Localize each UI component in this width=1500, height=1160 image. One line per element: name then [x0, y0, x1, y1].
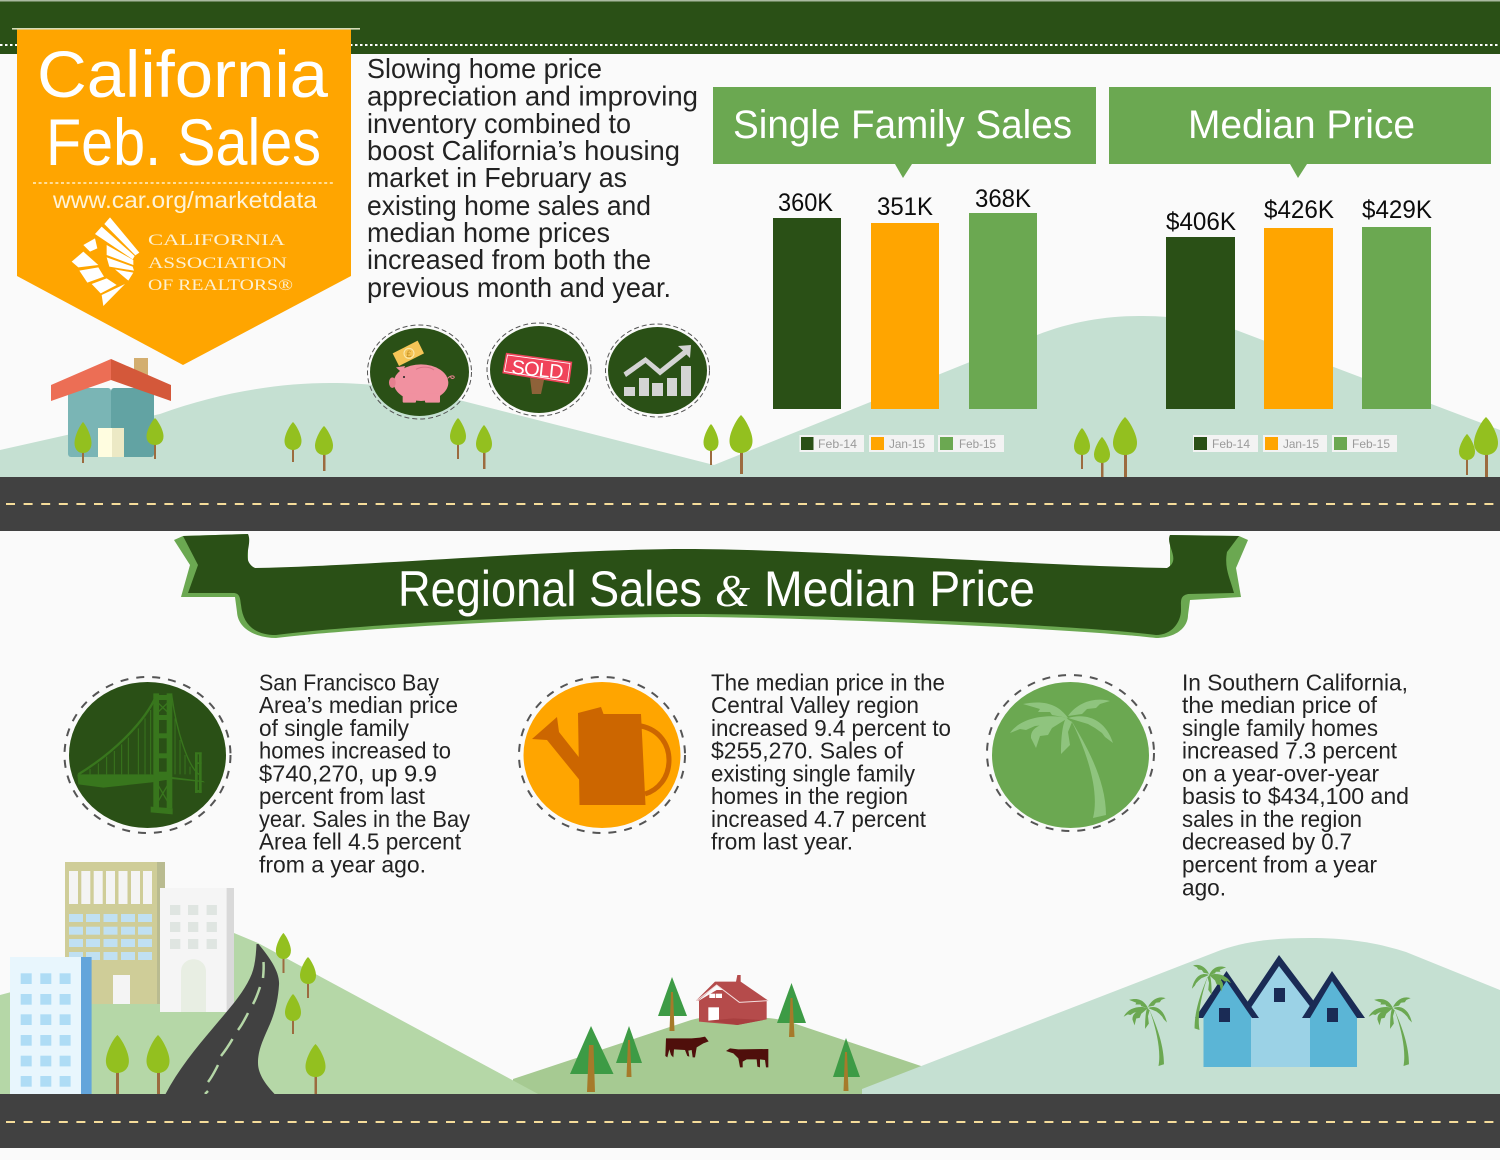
bar chart: single family sales: 360K — [778, 189, 833, 217]
text: Central Valley: increased 9.4 percent to — [711, 715, 951, 741]
header: Single Family Sales: Single Family Sales — [733, 103, 1072, 147]
intro text: boost California’s housing — [367, 135, 680, 166]
text: Southern California: on a year-over-year — [1182, 760, 1379, 786]
pine trees — [570, 977, 860, 1092]
text: San Francisco Bay: year. Sales in the Bay — [259, 806, 470, 832]
road: bottom — [0, 1094, 1500, 1148]
legend: price chart: Jan-15 — [1283, 437, 1319, 451]
trees: city — [106, 933, 326, 1094]
ribbon: Regional Sales & Median Price: & — [715, 565, 750, 616]
text: Southern California — [1182, 670, 1409, 900]
bar chart: single family sales: 351K — [877, 193, 933, 221]
bar chart: median price: $426K — [1264, 196, 1334, 224]
text: Southern California: increased 7.3 percent — [1182, 738, 1397, 764]
text: San Francisco Bay: of single family — [259, 715, 409, 741]
bar chart: median price — [1166, 196, 1432, 409]
intro text: median home prices — [367, 217, 610, 248]
text: San Francisco Bay: Area’s median price — [259, 692, 458, 718]
ribbon: Regional Sales & Median Price: Regional Sales — [398, 561, 702, 617]
icon: piggy bank — [368, 325, 472, 419]
text: San Francisco Bay: percent from last — [259, 783, 425, 809]
legend: sales chart: Jan-15 — [889, 437, 925, 451]
legend: sales chart — [800, 435, 1004, 452]
text: Southern California: decreased by 0.7 — [1182, 828, 1352, 854]
text: San Francisco Bay: from a year ago. — [259, 852, 426, 878]
text: San Francisco Bay: San Francisco Bay — [259, 670, 439, 696]
legend: price chart — [1193, 435, 1397, 452]
bottom hills — [0, 933, 1500, 1095]
bar chart: median price: $429K — [1362, 196, 1432, 224]
icon: golden gate bridge — [64, 677, 230, 833]
header: Median Price: Median Price — [1188, 103, 1415, 147]
legend: price chart: Feb-15 — [1352, 437, 1390, 451]
logo: california association of realtors: OF REALTORS® — [148, 277, 293, 294]
top band — [0, 0, 1500, 54]
intro text: market in February as — [367, 162, 627, 193]
top hills — [0, 316, 1500, 478]
text: San Francisco Bay: $740,270, up 9.9 — [259, 760, 437, 786]
text: San Francisco Bay: Area fell 4.5 percent — [259, 828, 461, 854]
intro text: previous month and year. — [367, 272, 671, 303]
legend: sales chart: Feb-14 — [818, 437, 857, 451]
text: Central Valley: homes in the region — [711, 783, 908, 809]
icon: palm tree — [987, 675, 1154, 831]
text: Southern California: single family homes — [1182, 715, 1378, 741]
bar chart: single family sales: 368K — [975, 185, 1031, 213]
text: Central Valley: increased 4.7 percent — [711, 806, 926, 832]
banner title — [37, 37, 328, 179]
text: Southern California: basis to $434,100 and — [1182, 783, 1409, 809]
text: Central Valley: $255,270. Sales of — [711, 738, 903, 764]
text: San Francisco Bay: homes increased to — [259, 738, 451, 764]
text: Central Valley: The median price in the — [711, 670, 945, 696]
icon: rising chart — [606, 324, 710, 417]
icon: sold sign — [487, 323, 591, 416]
icon: watering can — [519, 677, 685, 833]
icon: sold sign: SOLD — [510, 357, 564, 384]
intro text: inventory combined to — [367, 108, 631, 139]
text: Southern California: ago. — [1182, 874, 1226, 900]
text: Central Valley: from last year. — [711, 828, 853, 854]
intro text: appreciation and improving — [367, 80, 698, 112]
banner: California Feb. Sales — [12, 28, 360, 365]
legend: price chart: Feb-14 — [1212, 437, 1250, 451]
text: Southern California: In Southern California, — [1182, 670, 1408, 696]
website url: www.car.org/marketdata — [52, 187, 317, 213]
ribbon: Regional Sales & Median Price — [174, 534, 1248, 638]
ribbon: Regional Sales & Median Price: Median Price — [764, 561, 1035, 617]
blue houses — [1195, 955, 1365, 1067]
icon: piggy bank: £ — [406, 349, 412, 359]
banner title: Feb. Sales — [46, 105, 321, 179]
banner title: California — [37, 37, 328, 111]
text: Southern California: sales in the region — [1182, 806, 1362, 832]
winding road — [165, 944, 279, 1095]
bar chart: median price: $406K — [1166, 208, 1236, 236]
palms — [1124, 965, 1412, 1066]
cows — [665, 1037, 768, 1067]
intro text — [367, 53, 698, 303]
logo: california association of realtors — [72, 217, 293, 306]
text: Central Valley — [711, 670, 951, 854]
city buildings — [10, 862, 234, 1094]
text: Southern California: percent from a year — [1182, 852, 1377, 878]
intro text: existing home sales and — [367, 190, 651, 221]
header: Median Price — [1109, 87, 1491, 178]
legend: sales chart: Feb-15 — [959, 437, 996, 451]
road: top — [0, 477, 1500, 531]
text: San Francisco Bay — [259, 670, 470, 878]
house — [51, 358, 171, 457]
logo: california association of realtors: ASSOCIATION — [148, 255, 288, 272]
trees: top scene — [74, 415, 1498, 477]
text: Southern California: the median price of — [1182, 692, 1377, 718]
red farmhouse — [696, 975, 768, 1025]
text: Central Valley: Central Valley region — [711, 692, 919, 718]
text: Central Valley: existing single family — [711, 760, 915, 786]
bar chart: single family sales — [773, 185, 1037, 409]
intro text: Slowing home price — [367, 53, 602, 84]
header: Single Family Sales — [713, 87, 1096, 178]
logo: california association of realtors: CALIFORNIA — [148, 232, 286, 249]
intro text: increased from both the — [367, 244, 651, 275]
